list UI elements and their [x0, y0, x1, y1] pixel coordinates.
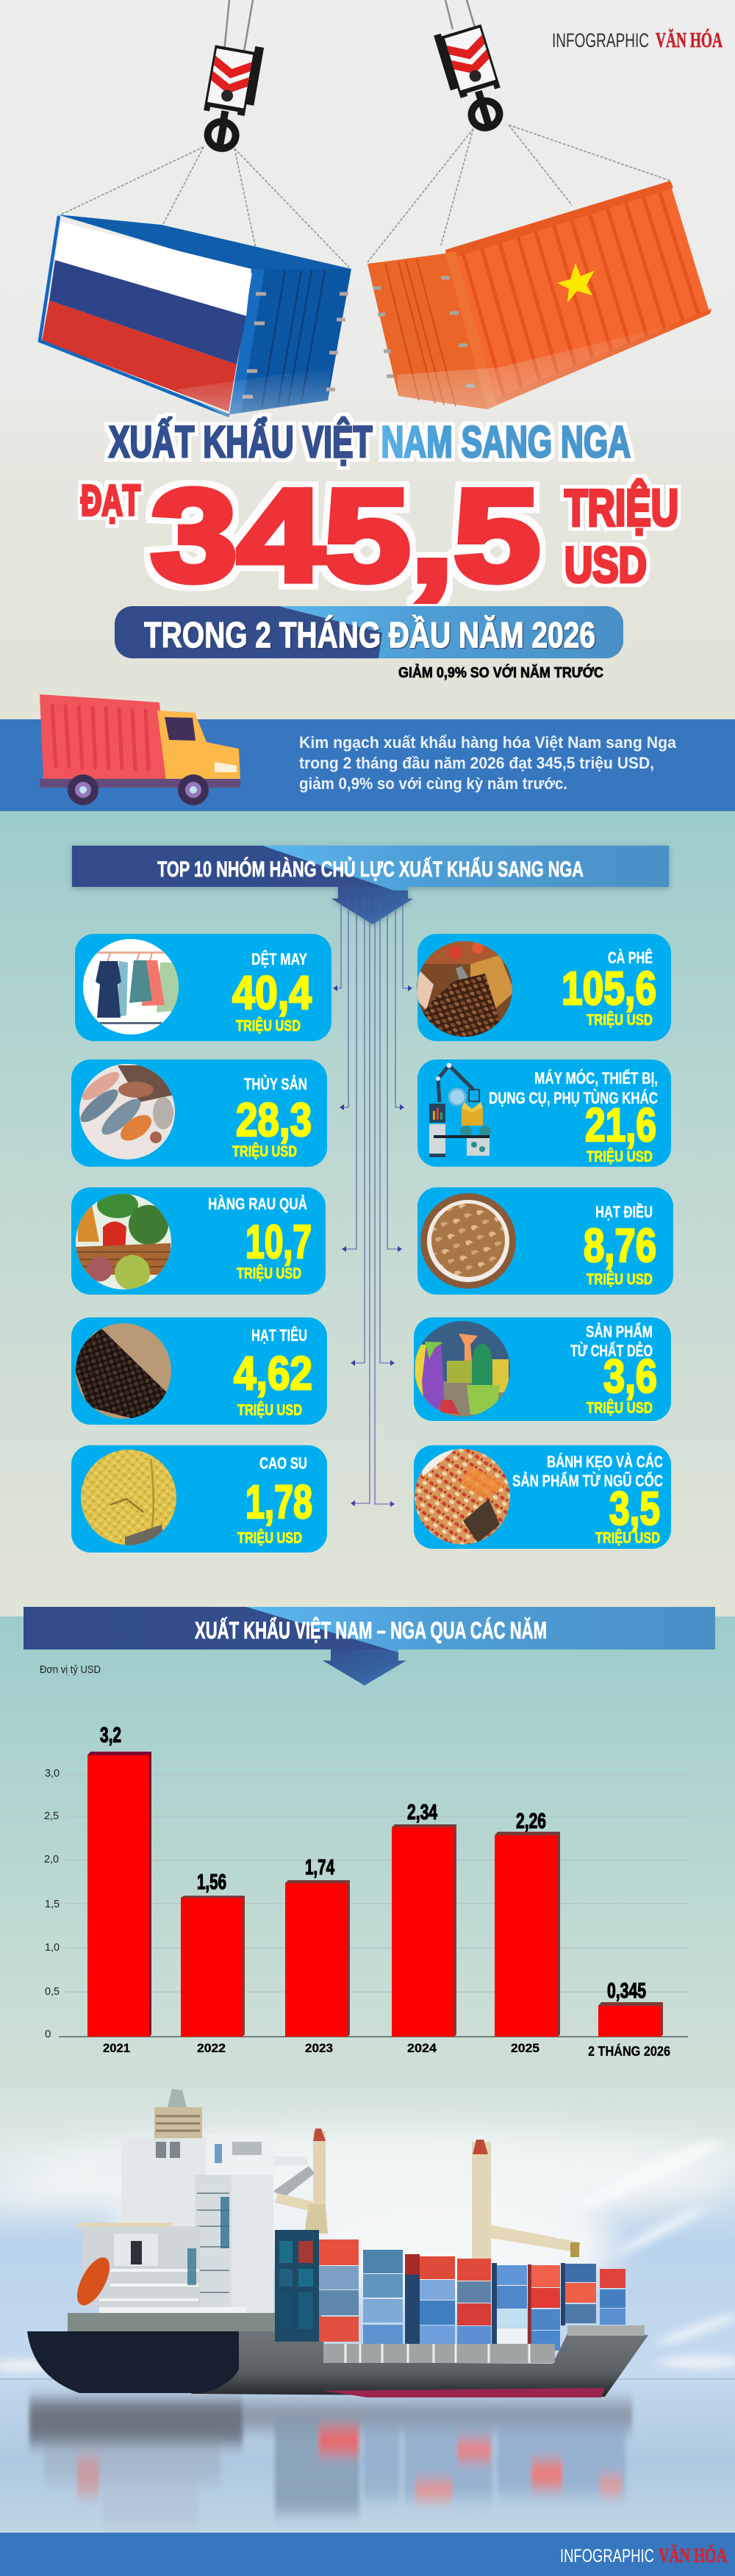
photo: coffee beans [415, 940, 514, 1040]
panel: cashew: HẠT ĐIỀU [595, 1203, 653, 1221]
y axis labels: 1,0 [45, 1941, 60, 1954]
panel: machinery: MÁY MÓC, THIẾT BỊ, [534, 1069, 658, 1087]
bar 2 months of 2026: 2 THÁNG 2026 [588, 2043, 670, 2059]
panel: textiles [75, 934, 331, 1041]
bar 2025 [495, 1810, 560, 2055]
photo: cereal bars [413, 1447, 513, 1547]
Vietnam container doors [368, 253, 487, 409]
panel: seafood: 28,3 [236, 1093, 312, 1146]
bar 2022: 2022 [197, 2041, 226, 2055]
superstructure [68, 2134, 321, 2331]
icon: industrial robot and conveyor [429, 1062, 491, 1157]
crane hook block right [434, 21, 511, 135]
y axis labels: 0 [45, 2028, 51, 2040]
bar 2 months of 2026 [588, 1979, 670, 2059]
Vietnam container side [445, 184, 710, 409]
panel: machinery: TRIỆU USD [587, 1148, 653, 1165]
funnel [154, 2089, 202, 2138]
bar 2 months of 2026: 0,345 [607, 1979, 646, 2003]
period pill: TRONG 2 THÁNG ĐẦU NĂM 2026 [144, 616, 595, 655]
panel: coffee: TRIỆU USD [587, 1011, 653, 1029]
container stacks [275, 2230, 645, 2363]
sea [0, 2379, 735, 2533]
panel: plastic products: 3,6 [603, 1350, 657, 1403]
lifeboat [71, 2253, 116, 2310]
panel: confectionery and cereal products: SẢN PHẨM TỪ NGŨ CỐC [512, 1471, 663, 1490]
crane hook block left [198, 40, 264, 154]
panel: vegetables and fruit: 10,7 [245, 1215, 312, 1268]
y axis labels: 0,5 [45, 1985, 60, 1998]
Russia container doors [229, 269, 351, 414]
photo: rubber sheets [79, 1449, 179, 1549]
sky [0, 2076, 735, 2379]
bar 2023 [285, 1856, 350, 2055]
bar 2022: 1,56 [197, 1871, 226, 1894]
bar 2023: 2023 [305, 2041, 333, 2055]
panel: plastic products: TRIỆU USD [587, 1399, 653, 1417]
panel: confectionery and cereal products: TRIỆU USD [595, 1529, 660, 1547]
bar 2024: 2024 [407, 2041, 437, 2055]
panel: cashew: TRIỆU USD [587, 1270, 653, 1288]
panel: coffee [415, 934, 671, 1041]
panel: pepper: 4,62 [234, 1347, 312, 1400]
hull [27, 2331, 648, 2397]
panel: rubber: TRIỆU USD [237, 1529, 302, 1547]
panel: confectionery and cereal products: 3,5 [609, 1482, 660, 1535]
bar 2024: 2,34 [407, 1801, 437, 1824]
yellow star [557, 263, 595, 303]
subtitle: decrease note: GIẢM 0,9% SO VỚI NĂM TRƯỚC [398, 663, 603, 681]
panel: machinery [417, 1059, 671, 1167]
Russia container roof [57, 215, 351, 273]
bar 2021 [87, 1724, 151, 2055]
photo: container ship at sea [0, 2076, 735, 2533]
panel: coffee: 105,6 [562, 962, 656, 1015]
headline figure: 345,5 million USD [81, 462, 678, 608]
y axis labels: 1,5 [45, 1898, 60, 1910]
bar 2022 [181, 1871, 245, 2055]
photo: black pepper on burlap [74, 1321, 173, 1421]
headline figure: 345,5 million USD: TRIỆU [564, 478, 678, 536]
background: hero [0, 0, 735, 719]
bar 2021: 2021 [103, 2041, 130, 2055]
panel: cashew: 8,76 [584, 1219, 656, 1272]
photo: bowl of cashews [419, 1192, 519, 1292]
text block: intro summary: trong 2 tháng đầu năm 2026 đạt 345,5 triệu USD, [299, 754, 654, 772]
background: top 10 section [0, 811, 735, 1616]
panel: textiles: DỆT MAY [251, 950, 307, 968]
heading banner: exports by year: XUẤT KHẨU VIỆT NAM – NGA QUA CÁC NĂM [195, 1617, 547, 1644]
photo: vegetable basket [74, 1192, 173, 1292]
bar 2021: 3,2 [100, 1724, 121, 1747]
unit note: Đơn vị tỷ USD [40, 1663, 101, 1676]
panel: textiles: 40,4 [232, 966, 312, 1019]
Russia flag red stripe [42, 301, 237, 411]
panel: vegetables and fruit: HÀNG RAU QUẢ [208, 1195, 307, 1213]
illustration: crane and Russia container [40, 0, 351, 419]
panel: vegetables and fruit [71, 1187, 326, 1295]
y axis labels [44, 1767, 60, 2040]
Russia flag blue stripe [49, 260, 246, 364]
panel: rubber [71, 1445, 327, 1553]
photo: clothes on a rail [81, 937, 181, 1037]
illustration: crane and Vietnam container [368, 0, 711, 411]
panel: machinery: 21,6 [585, 1098, 656, 1151]
headline figure: 345,5 million USD: 345,5 [151, 462, 540, 608]
heading banner: exports by year [24, 1607, 715, 1685]
bar chart: exports 2021 to 2 months of 2026 [44, 1724, 688, 2059]
panel: rubber: CAO SU [259, 1454, 307, 1472]
text block: intro summary: giảm 0,9% so với cùng kỳ năm trước. [299, 774, 567, 793]
bar 2024 [392, 1801, 456, 2055]
cloud wisps [0, 2133, 735, 2372]
panel: confectionery and cereal products [413, 1445, 671, 1549]
logo: Infographic Văn Hóa: INFOGRAPHIC [552, 29, 649, 51]
panel: vegetables and fruit: TRIỆU USD [237, 1264, 301, 1282]
panel: coffee: CÀ PHÊ [608, 949, 653, 967]
panel: cashew [417, 1187, 673, 1295]
panel: textiles: TRIỆU USD [236, 1017, 301, 1035]
heading banner: top 10 [72, 846, 669, 924]
text block: intro summary: Kim ngạch xuất khẩu hàng hóa Việt Nam sang Nga [299, 733, 677, 752]
bar 2025: 2025 [511, 2041, 539, 2055]
clouds [0, 2131, 735, 2303]
panel: confectionery and cereal products: BÁNH KẸO VÀ CÁC [547, 1453, 663, 1471]
panel: seafood [71, 1059, 327, 1167]
panel: seafood: TRIỆU USD [232, 1143, 297, 1160]
headline figure: 345,5 million USD: ĐẠT [81, 477, 140, 525]
bar 2023: 1,74 [305, 1856, 334, 1879]
background: chart section [0, 1616, 735, 2087]
y axis labels: 2,0 [44, 1853, 59, 1866]
period pill [115, 606, 623, 658]
heading banner: top 10: TOP 10 NHÓM HÀNG CHỦ LỰC XUẤT KHẨU SANG NGA [157, 857, 584, 882]
panel: pepper: HẠT TIÊU [251, 1326, 307, 1345]
footer band [0, 2533, 735, 2576]
headline figure: 345,5 million USD: USD [564, 537, 647, 593]
icon: truck [40, 694, 240, 805]
panel: pepper: TRIỆU USD [237, 1401, 302, 1419]
crane posts and booms [273, 2129, 581, 2263]
text block: intro summary [299, 733, 677, 793]
bar 2025: 2,26 [516, 1810, 546, 1833]
photo: plastic bottles and basket [413, 1320, 513, 1420]
y axis labels: 3,0 [45, 1767, 60, 1780]
panel: plastic products [413, 1317, 671, 1421]
background: blue intro band [0, 719, 735, 811]
panel: plastic products: TỪ CHẤT DẺO [570, 1342, 653, 1360]
panel: machinery: DỤNG CỤ, PHỤ TÙNG KHÁC [489, 1089, 658, 1107]
connector arrows from banner to cards [333, 899, 412, 1507]
panel: seafood: THỦY SẢN [244, 1075, 307, 1093]
y axis labels: 2,5 [44, 1810, 59, 1822]
footer logo: INFOGRAPHIC [560, 2546, 654, 2566]
reflection [29, 2400, 632, 2525]
Russia flag white stripe [55, 222, 251, 316]
photo: fish and shrimp [76, 1062, 177, 1162]
panel: rubber: 1,78 [245, 1475, 312, 1528]
panel: pepper [71, 1317, 327, 1425]
panel: plastic products: SẢN PHẨM [586, 1323, 653, 1341]
